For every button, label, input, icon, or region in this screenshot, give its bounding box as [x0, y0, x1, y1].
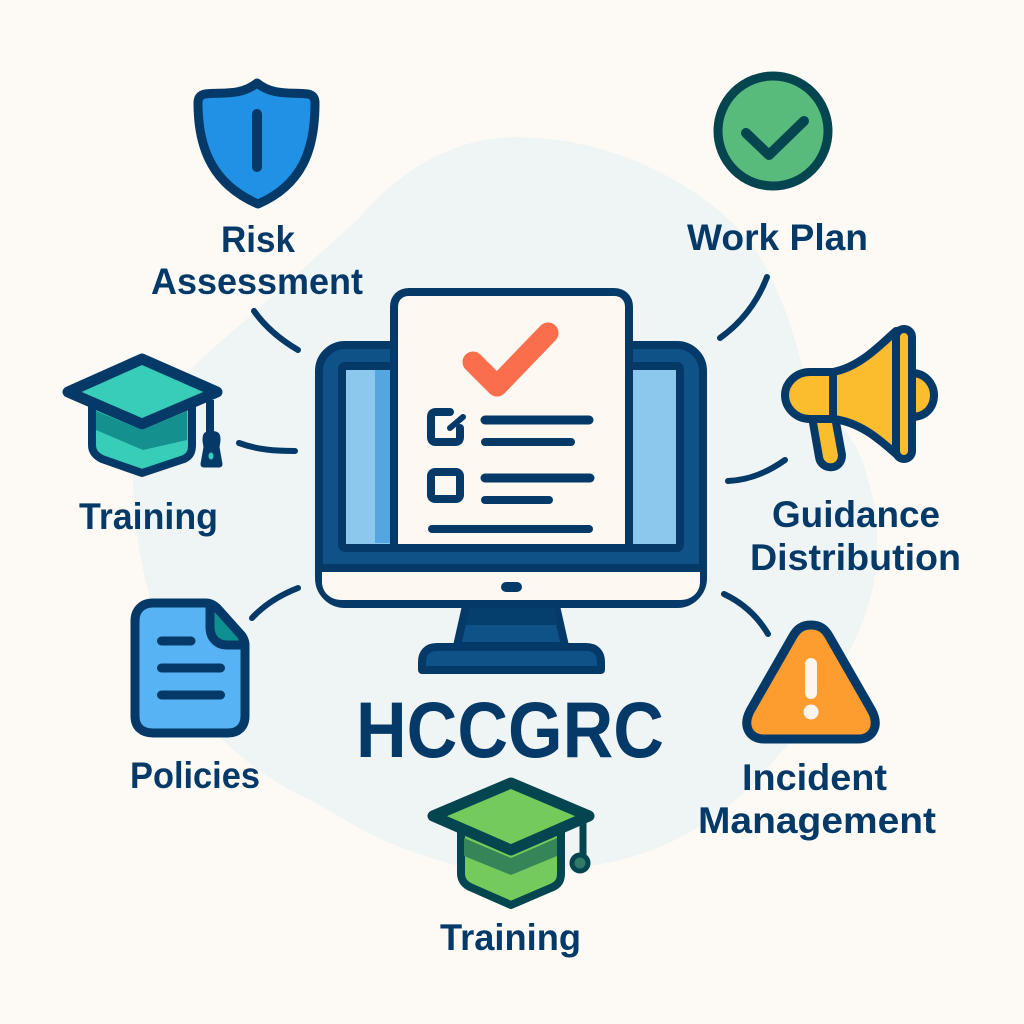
label: Training left: Training — [79, 496, 218, 537]
orange check mark — [473, 333, 548, 386]
icon: megaphone — [785, 329, 934, 467]
connector: guidance — [728, 460, 785, 481]
label: Risk Assessment — [151, 219, 363, 302]
connector: incident — [724, 594, 768, 634]
connector: risk assessment — [254, 311, 298, 350]
screen — [342, 366, 680, 548]
icon: work plan check circle — [718, 76, 828, 186]
label: Incident Management — [698, 757, 936, 841]
label: Guidance Distribution — [750, 494, 961, 578]
monitor stand — [422, 606, 601, 670]
icon: warning triangle — [747, 625, 875, 739]
paper document — [394, 292, 629, 548]
icon: teal graduation cap — [68, 359, 222, 473]
connector: training left — [239, 443, 295, 451]
icon: document — [135, 603, 245, 733]
label: Incident Management: Management — [698, 800, 936, 841]
icon: green graduation cap — [433, 783, 589, 905]
label: Incident Management: Incident — [742, 757, 887, 798]
icon: shield — [198, 83, 315, 204]
label: Guidance Distribution: Guidance — [772, 494, 940, 535]
title: HCCGRC: HCCGRC — [356, 685, 664, 774]
monitor chin — [322, 572, 700, 600]
checklist — [431, 412, 590, 529]
label: Risk Assessment: Risk — [221, 219, 295, 260]
monitor — [319, 292, 703, 670]
label: Guidance Distribution: Distribution — [750, 537, 961, 578]
label: Policies: Policies — [130, 755, 260, 796]
label: Work Plan: Work Plan — [687, 217, 868, 258]
background blob — [133, 137, 877, 870]
label: Risk Assessment: Assessment — [151, 261, 363, 302]
label: Training bottom: Training — [440, 917, 581, 958]
connector: policies — [252, 588, 298, 618]
monitor body — [319, 345, 703, 604]
connector: work plan — [720, 277, 767, 338]
